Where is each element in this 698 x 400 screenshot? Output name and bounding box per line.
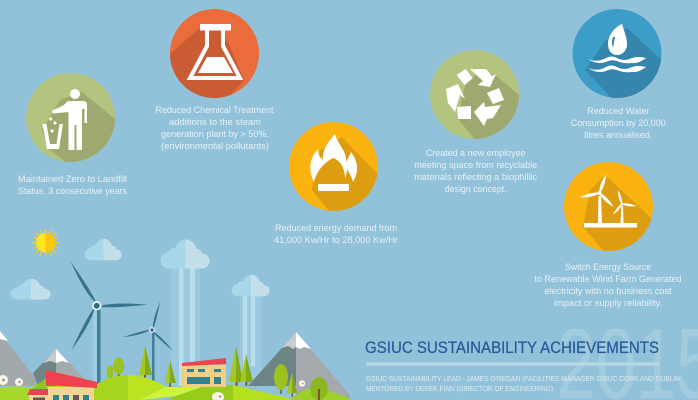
panel: recyclable meeting space	[414, 50, 537, 195]
text: energy: Reduced energy demand from	[275, 223, 397, 234]
sun	[32, 229, 60, 256]
text: water: litres annualised.	[584, 130, 652, 141]
icon: person using bin	[26, 73, 116, 170]
panel: chemical treatment	[156, 9, 274, 152]
cloud left	[11, 279, 51, 300]
mountain left centre	[33, 349, 84, 390]
text: chemical: additions to the steam	[169, 117, 261, 128]
text: energy	[274, 223, 398, 246]
cloud top left	[85, 239, 122, 260]
text: wind: to Renewable Wind Farm Generated	[534, 274, 682, 285]
centre house	[182, 358, 226, 387]
cloud with rain beams right	[232, 275, 270, 381]
icon: flame	[289, 122, 378, 211]
conifer and round trees behind hills	[106, 346, 253, 387]
text: meeting space: materials reflecting a biophillic	[414, 172, 537, 183]
text: wind: electricity with no business cost	[544, 286, 672, 297]
text: chemical: (environmental pollutants)	[161, 141, 269, 152]
text: water	[571, 106, 666, 141]
text: landfill: Status. 3 consecutive years	[18, 186, 127, 197]
text: energy: 41,000 Kw/Hr to 28,000 Kw/Hr	[274, 235, 398, 246]
text: landfill	[18, 174, 127, 197]
credits: MENTORED BY DEREK FINN (DIRECTOR OF ENGINEERING)	[366, 384, 553, 393]
text: wind: impact or supply reliability.	[554, 298, 662, 309]
large wind turbine	[69, 261, 148, 386]
icon: wind turbines	[564, 162, 653, 251]
title: GSIUC SUSTAINABILITY ACHIEVEMENTS	[365, 339, 659, 357]
text: water: Reduced Water	[587, 106, 649, 117]
text: meeting space: Created a new employee	[426, 148, 526, 159]
icon: flask	[170, 9, 259, 98]
text: meeting space	[414, 148, 537, 195]
text: chemical	[156, 105, 274, 152]
text: wind	[534, 262, 682, 309]
large house	[46, 370, 97, 400]
foreground trees right	[274, 364, 328, 400]
text: chemical: generation plant by > 50%.	[161, 129, 269, 140]
text: meeting space: design concept.	[445, 184, 507, 195]
mountain far left	[0, 331, 42, 386]
mountain right	[248, 332, 350, 400]
credits	[366, 374, 684, 393]
text: chemical: Reduced Chemical Treatment	[156, 105, 274, 116]
text: landfill: Maintained Zero to Landfill	[18, 174, 127, 185]
cloud with rain beams centre	[160, 239, 210, 386]
panel: zero to landfill	[18, 73, 127, 197]
panel: energy demand	[274, 122, 398, 246]
green hills	[0, 375, 350, 400]
text: meeting space: meeting space from recyclable	[414, 160, 537, 171]
small wind turbine	[123, 301, 174, 383]
small house	[27, 389, 48, 400]
icon: water drop and waves	[572, 9, 662, 98]
icon: recycle arrows	[430, 50, 519, 139]
text: water: Consumption by 20,000	[571, 118, 666, 129]
panel: renewable wind energy	[534, 162, 682, 309]
panel: water consumption	[571, 9, 668, 141]
sheep	[0, 375, 305, 400]
text: wind: Switch Energy Source	[565, 262, 651, 273]
